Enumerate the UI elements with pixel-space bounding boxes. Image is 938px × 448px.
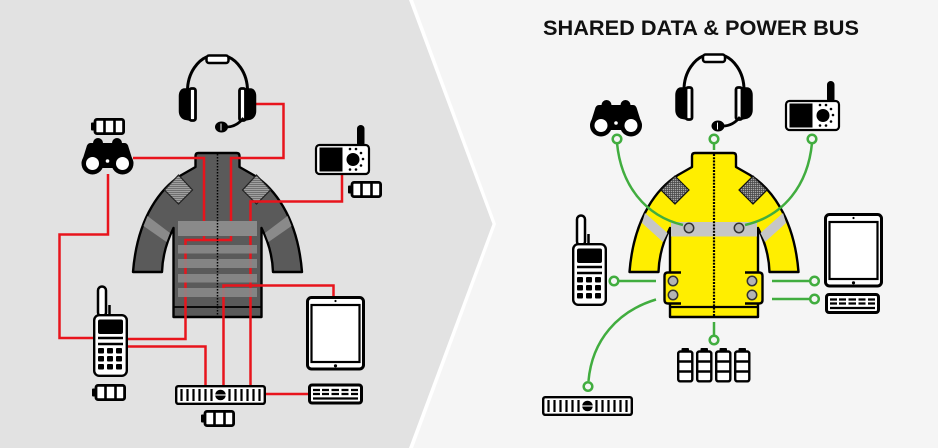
title: SHARED DATA & POWER BUS <box>543 17 859 40</box>
icon: tablet <box>826 214 882 286</box>
yellow jacket <box>630 153 798 317</box>
dark jacket <box>133 153 302 317</box>
icon: binoculars <box>82 138 134 174</box>
icon: binoculars battery <box>91 119 124 134</box>
red point-to-point wires <box>60 104 342 394</box>
icon: keyboard <box>310 385 362 403</box>
icon: camera <box>786 81 839 130</box>
green link terminals <box>584 135 819 391</box>
icon: binoculars <box>590 100 642 136</box>
green bus links <box>588 143 812 381</box>
left connector pocket <box>664 272 681 304</box>
right connector pocket <box>745 272 762 304</box>
icon: tablet <box>308 298 364 369</box>
panel: right diagram, shared bus <box>543 54 882 415</box>
icon: rack unit <box>176 386 265 404</box>
icon: keyboard <box>826 294 878 312</box>
panel: separate systems chevron <box>0 0 492 448</box>
icon: headset <box>676 54 752 132</box>
icon: radio battery <box>92 385 125 400</box>
icon: rack battery <box>201 411 234 426</box>
icon: radio <box>94 286 127 376</box>
icon: rack unit <box>543 397 632 415</box>
icon: headset <box>180 56 256 132</box>
icon: radio <box>573 216 606 305</box>
jacket reflective stripes <box>178 221 257 297</box>
icon: camera <box>316 125 369 174</box>
panel: left diagram, separate wiring <box>60 56 381 426</box>
icon: camera battery <box>348 182 381 197</box>
bus connector ports <box>668 223 757 300</box>
icon: shared battery bank <box>678 348 750 381</box>
white chevron border <box>0 0 496 448</box>
jacket zipper <box>216 154 218 317</box>
